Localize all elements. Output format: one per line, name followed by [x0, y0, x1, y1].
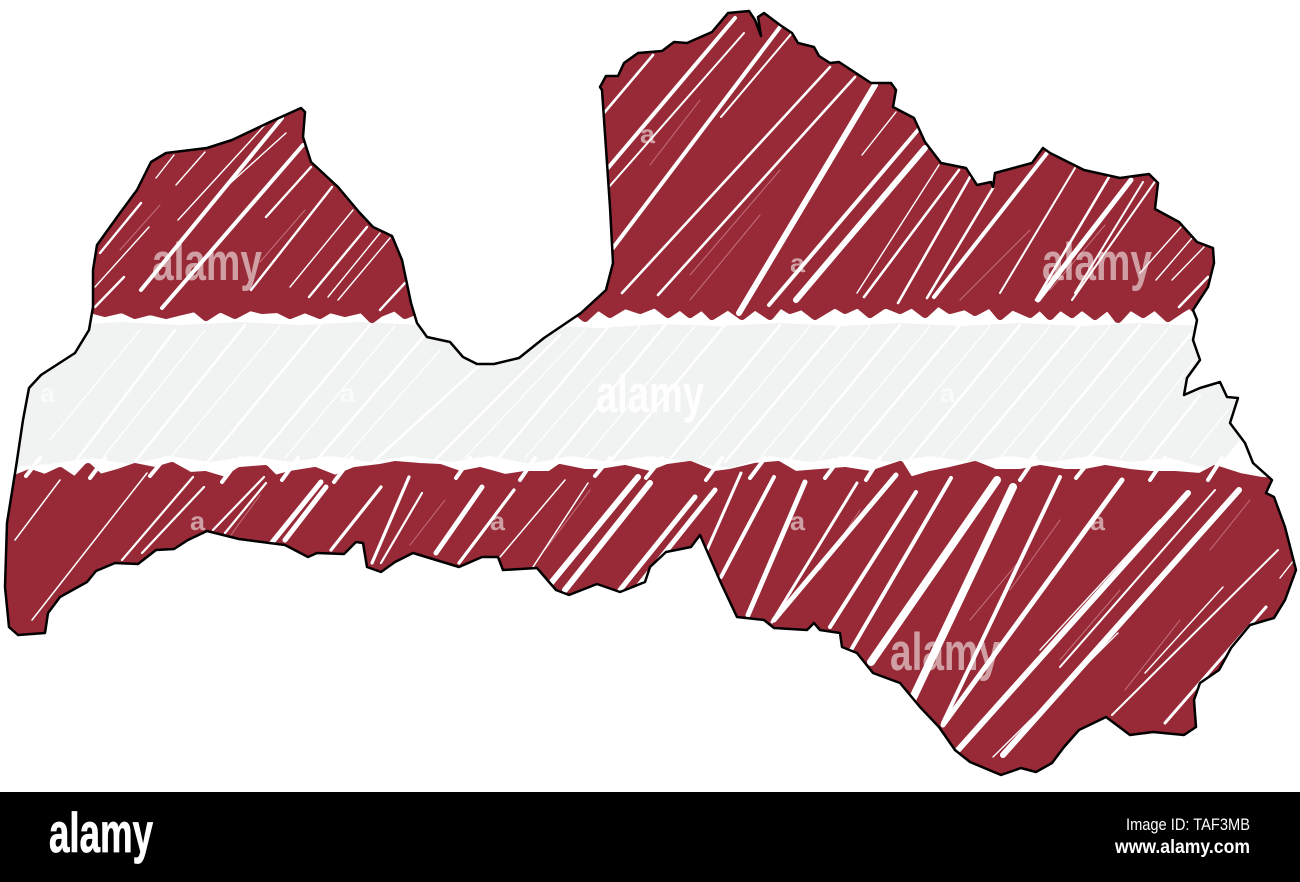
hatch: southern band west: [15, 458, 722, 620]
bottom red band: [0, 465, 1300, 800]
pale streaks inside red: [120, 100, 1250, 690]
notches between lobes: [750, 458, 1222, 480]
top red band: [93, 12, 1213, 323]
watermark: south-east: alamy: [890, 623, 1000, 682]
footer bar: [0, 792, 1300, 882]
image id: Image ID: TAF3MB: [1126, 815, 1250, 834]
small watermark letters: a: [1090, 506, 1106, 536]
small watermark letters: a: [190, 506, 206, 536]
small watermark letters: a: [790, 248, 806, 278]
small watermark letters: a: [790, 506, 806, 536]
watermarks: alamy: [40, 119, 1152, 682]
watermark: centre: alamy: [596, 365, 704, 424]
small watermark letters: a: [940, 378, 956, 408]
watermark: north-east: alamy: [1042, 233, 1152, 292]
website: www.alamy.com: [1114, 837, 1250, 858]
watermark: north-west: alamy: [152, 233, 262, 292]
hatch: southern band east: [707, 458, 1294, 757]
small watermark letters: a: [40, 378, 56, 408]
hatch: north-east lobe: [604, 18, 1208, 313]
small watermark letters: [40, 119, 1106, 536]
small watermark letters: a: [640, 119, 656, 149]
small watermark letters: a: [490, 506, 506, 536]
small watermark letters: a: [340, 378, 356, 408]
footer logo: alamy: [49, 801, 153, 864]
hatch: north-west lobe: [95, 118, 405, 310]
white flag band: [0, 322, 1300, 470]
notches between lobes: [26, 458, 722, 482]
